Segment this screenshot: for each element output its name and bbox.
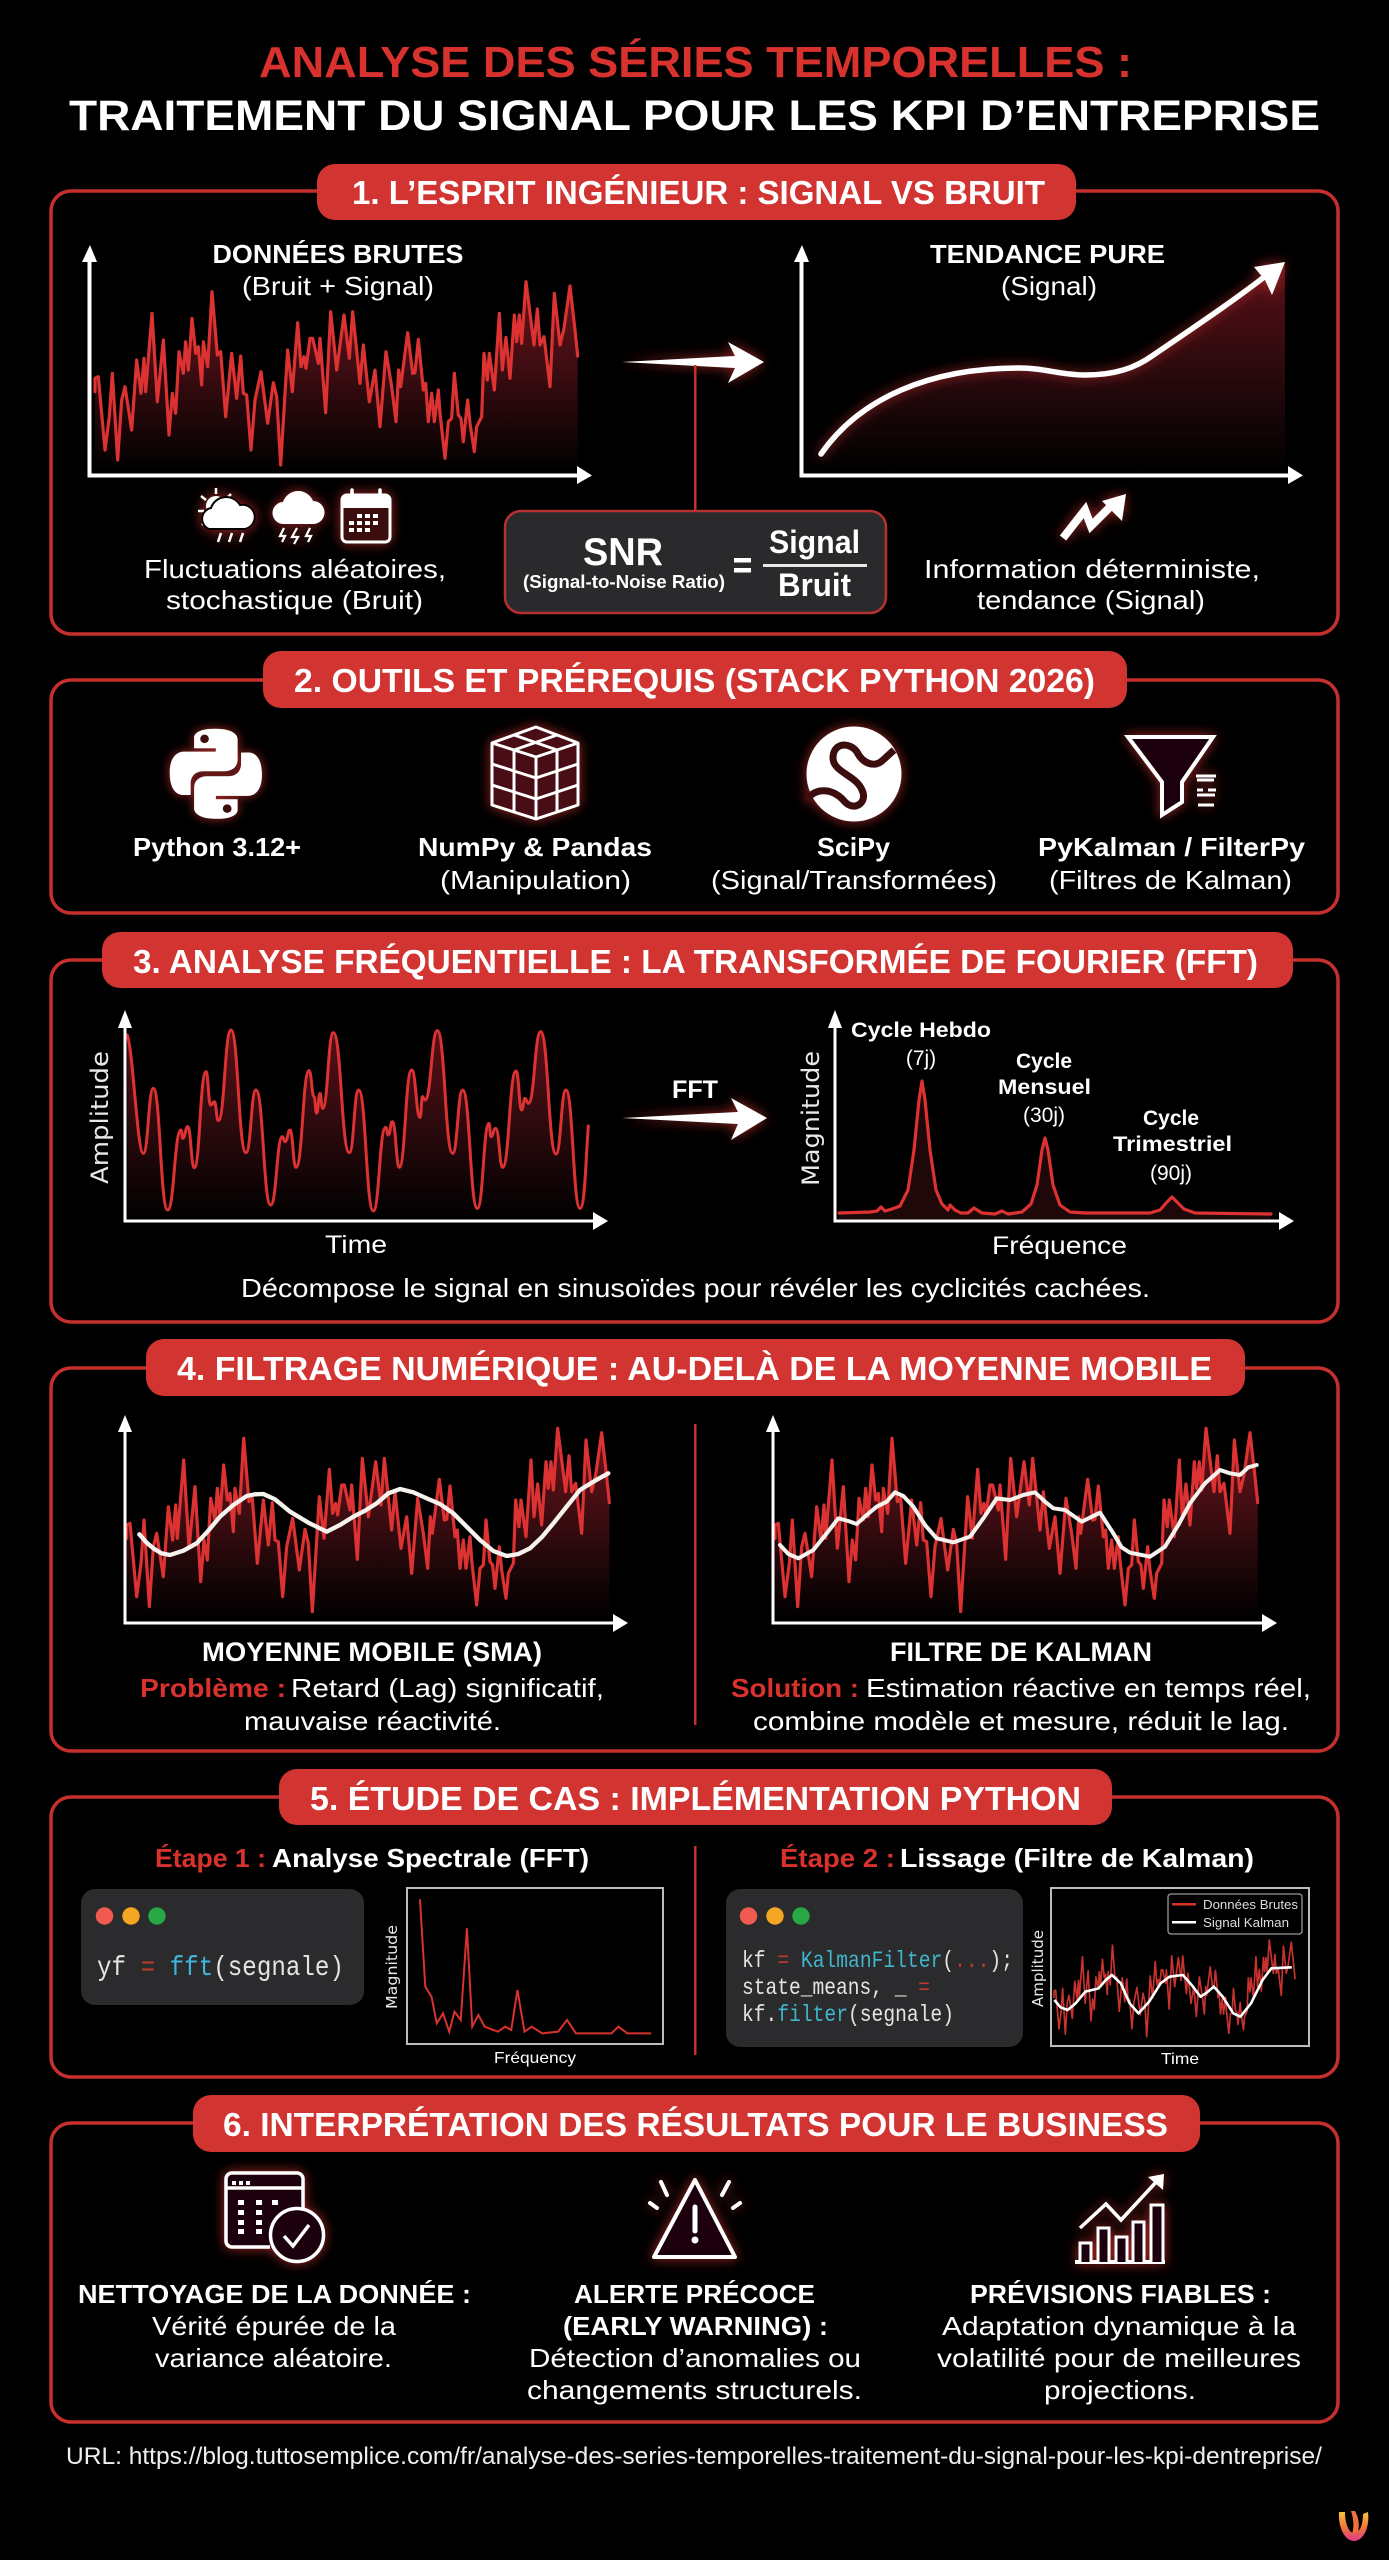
heading: section 6: 6. INTERPRÉTATION DES RÉSULTATS POUR LE BUSINESS — [223, 2106, 1168, 2143]
code block: kalman — [726, 1889, 1023, 2047]
text: prévisions: volatilité pour de meilleures — [937, 2343, 1301, 2373]
label: numpy: (Manipulation) — [440, 865, 631, 895]
chart: frequency spectrum — [828, 1010, 1294, 1230]
annotation: quarterly cycle: (90j) — [1150, 1162, 1192, 1185]
legend: Signal Kalman — [1203, 1915, 1289, 1930]
chart: raw noisy data — [82, 245, 592, 484]
text: alerte précoce: changements structurels. — [527, 2375, 862, 2405]
heading: section 1 — [317, 164, 1076, 220]
text: données brutes: DONNÉES BRUTES — [212, 239, 464, 269]
heading: section 3 — [102, 932, 1293, 988]
text: filtre de kalman: FILTRE DE KALMAN — [890, 1637, 1152, 1667]
annotation: monthly cycle — [998, 1050, 1091, 1127]
callout: SNR formula: Signal — [769, 524, 860, 560]
icon: calendar — [342, 490, 390, 542]
chart: pure trend — [794, 245, 1303, 484]
icon: storm cloud — [272, 491, 324, 544]
text: prévisions: Adaptation dynamique à la — [942, 2311, 1297, 2341]
text: moyenne mobile: mauvaise réactivité. — [244, 1706, 501, 1736]
heading: étape 2: Étape 2 : — [780, 1843, 895, 1873]
text: filtre de kalman: Estimation réactive en temps réel, — [866, 1673, 1311, 1703]
connector to SNR — [694, 365, 696, 511]
icon: calendar with check — [226, 2173, 324, 2262]
chart: mini kalman — [1051, 1888, 1309, 2046]
axis label: amplitude: Amplitude — [86, 1051, 114, 1184]
code block: fft: yf = fft(segnale) — [97, 1953, 344, 1984]
heading: section 4: 4. FILTRAGE NUMÉRIQUE : AU-DELÀ DE LA MOYENNE MOBILE — [177, 1350, 1212, 1387]
icon: warning triangle — [650, 2180, 740, 2257]
annotation: weekly cycle — [851, 1019, 991, 1070]
text: fourier caption: Décompose le signal en sinusoïdes pour révéler les cyclicités cachées. — [241, 1273, 1150, 1303]
text: nettoyage: Vérité épurée de la — [152, 2311, 397, 2341]
heading: étape 1: Étape 1 : — [155, 1843, 266, 1873]
heading: section 4 — [146, 1339, 1245, 1396]
panel: 5 étude de cas — [51, 1769, 1338, 2077]
text: alerte précoce: Détection d’anomalies ou — [529, 2343, 861, 2373]
heading: étape 1: Analyse Spectrale (FFT) — [272, 1843, 589, 1873]
panel: 6 interprétation — [51, 2095, 1338, 2422]
text: tendance pure — [930, 239, 1165, 301]
annotation: monthly cycle: (30j) — [1023, 1104, 1065, 1127]
text: signal caption — [924, 554, 1260, 615]
heading: étape 2 — [780, 1843, 1254, 1873]
text: moyenne mobile: MOYENNE MOBILE (SMA) — [202, 1637, 542, 1667]
code block: kalman: kf.filter(segnale) — [742, 2002, 954, 2028]
text: prévisions — [937, 2279, 1301, 2405]
text: filtre de kalman: combine modèle et mesure, réduit le lag. — [753, 1706, 1289, 1736]
heading: section 5: 5. ÉTUDE DE CAS : IMPLÉMENTATION PYTHON — [310, 1780, 1081, 1817]
legend: Données Brutes — [1203, 1897, 1298, 1912]
text: moyenne mobile: Problème : — [140, 1673, 286, 1703]
text: nettoyage: variance aléatoire. — [155, 2343, 392, 2373]
logo — [1339, 2511, 1368, 2541]
annotation: quarterly cycle: Trimestriel — [1113, 1133, 1232, 1156]
axis label: mini amplitude: Amplitude — [1029, 1930, 1047, 2007]
callout: SNR formula: (Signal-to-Noise Ratio) — [523, 572, 725, 592]
code block: kalman: state_means, _ = — [742, 1975, 930, 2001]
heading: étape 1 — [155, 1843, 589, 1873]
icon: python — [170, 729, 262, 819]
annotation: monthly cycle: Mensuel — [998, 1076, 1091, 1099]
label: scipy — [711, 832, 997, 895]
heading: section 6 — [193, 2095, 1200, 2152]
chart: kalman filter — [766, 1415, 1277, 1632]
divider — [694, 1424, 696, 1725]
label: pykalman: (Filtres de Kalman) — [1049, 865, 1292, 895]
heading: section 5 — [279, 1769, 1112, 1825]
text: moyenne mobile — [140, 1637, 604, 1736]
label: scipy: (Signal/Transformées) — [711, 865, 997, 895]
text: bruit caption: stochastique (Bruit) — [166, 585, 423, 615]
title — [69, 37, 1320, 140]
label: pykalman — [1038, 832, 1306, 895]
callout: SNR formula: SNR — [583, 531, 663, 574]
text: filtre de kalman — [731, 1637, 1311, 1736]
heading: section 2 — [263, 651, 1127, 708]
text: alerte précoce — [527, 2279, 862, 2405]
title: ANALYSE DES SÉRIES TEMPORELLES : — [259, 37, 1132, 87]
annotation: monthly cycle: Cycle — [1016, 1050, 1072, 1073]
label: FFT: FFT — [672, 1076, 718, 1104]
text: nettoyage — [78, 2279, 471, 2373]
text: moyenne mobile: Retard (Lag) significatif, — [291, 1673, 604, 1703]
axis label: fréquence: Fréquence — [992, 1232, 1127, 1260]
panel: 4 filtrage — [51, 1339, 1338, 1751]
axis label: mini magnitude: Magnitude — [383, 1925, 401, 2009]
text: alerte précoce: ALERTE PRÉCOCE — [574, 2279, 815, 2309]
axis label: magnitude: Magnitude — [797, 1051, 825, 1186]
heading: étape 2: Lissage (Filtre de Kalman) — [900, 1843, 1254, 1873]
axis label: mini time: Time — [1161, 2051, 1199, 2068]
icon: sun and rain cloud — [198, 488, 255, 542]
annotation: weekly cycle: (7j) — [906, 1047, 936, 1070]
annotation: quarterly cycle — [1113, 1107, 1232, 1185]
text: données brutes — [212, 239, 464, 301]
chart: moving average — [118, 1415, 628, 1632]
panel: 3 fourier — [51, 932, 1338, 1322]
text: données brutes: (Bruit + Signal) — [242, 271, 434, 301]
text: signal caption: Information déterministe, — [924, 554, 1260, 584]
code block: kalman: kf = KalmanFilter(...); — [742, 1948, 1013, 1974]
panel: 2 outils — [51, 651, 1338, 913]
arrow: raw to trend — [622, 342, 764, 383]
text: tendance pure: (Signal) — [1001, 271, 1097, 301]
icon: numpy cube — [492, 727, 578, 819]
label: pykalman: PyKalman / FilterPy — [1038, 832, 1306, 862]
label: numpy: NumPy & Pandas — [418, 832, 652, 862]
heading: section 3: 3. ANALYSE FRÉQUENTIELLE : LA TRANSFORMÉE DE FOURIER (FFT) — [133, 943, 1258, 980]
callout: SNR formula: Bruit — [778, 567, 851, 603]
label: numpy — [418, 832, 652, 895]
chart: time domain wave — [118, 1010, 608, 1230]
heading: section 1: 1. L’ESPRIT INGÉNIEUR : SIGNAL VS BRUIT — [352, 174, 1045, 211]
text: tendance pure: TENDANCE PURE — [930, 239, 1165, 269]
annotation: weekly cycle: Cycle Hebdo — [851, 1019, 991, 1042]
annotation: quarterly cycle: Cycle — [1143, 1107, 1199, 1130]
text: bruit caption: Fluctuations aléatoires, — [144, 554, 446, 584]
arrow: FFT — [622, 1098, 767, 1140]
callout: SNR formula — [505, 511, 886, 613]
source URL: URL: https://blog.tuttosemplice.com/fr/analyse-des-series-temporelles-traitement-du-signal-pour-les-kpi-dentreprise/ — [66, 2443, 1322, 2470]
icon: growth arrow — [1063, 494, 1126, 538]
heading: section 2: 2. OUTILS ET PRÉREQUIS (STACK PYTHON 2026) — [294, 662, 1095, 699]
text: signal caption: tendance (Signal) — [977, 585, 1205, 615]
divider — [694, 1846, 696, 2055]
icon: bar chart with arrow — [1075, 2174, 1165, 2262]
text: prévisions: PRÉVISIONS FIABLES : — [970, 2279, 1271, 2309]
text: nettoyage: NETTOYAGE DE LA DONNÉE : — [78, 2279, 471, 2309]
text: bruit caption — [144, 554, 446, 615]
label: scipy: SciPy — [817, 832, 891, 862]
panel: 1 signal vs bruit — [51, 164, 1338, 634]
title: TRAITEMENT DU SIGNAL POUR LES KPI D’ENTREPRISE — [69, 92, 1320, 140]
text: prévisions: projections. — [1044, 2375, 1196, 2405]
icon: scipy — [806, 726, 902, 822]
text: alerte précoce: (EARLY WARNING) : — [563, 2311, 828, 2341]
icon: filter funnel — [1128, 737, 1216, 815]
axis label: mini frequency: Fréquency — [494, 2050, 576, 2067]
text: filtre de kalman: Solution : — [731, 1673, 859, 1703]
label: python: Python 3.12+ — [133, 832, 301, 862]
chart: mini spectrum — [407, 1888, 663, 2044]
code block: fft — [81, 1889, 364, 2005]
axis label: time: Time — [325, 1231, 387, 1259]
legend — [1168, 1894, 1302, 1934]
